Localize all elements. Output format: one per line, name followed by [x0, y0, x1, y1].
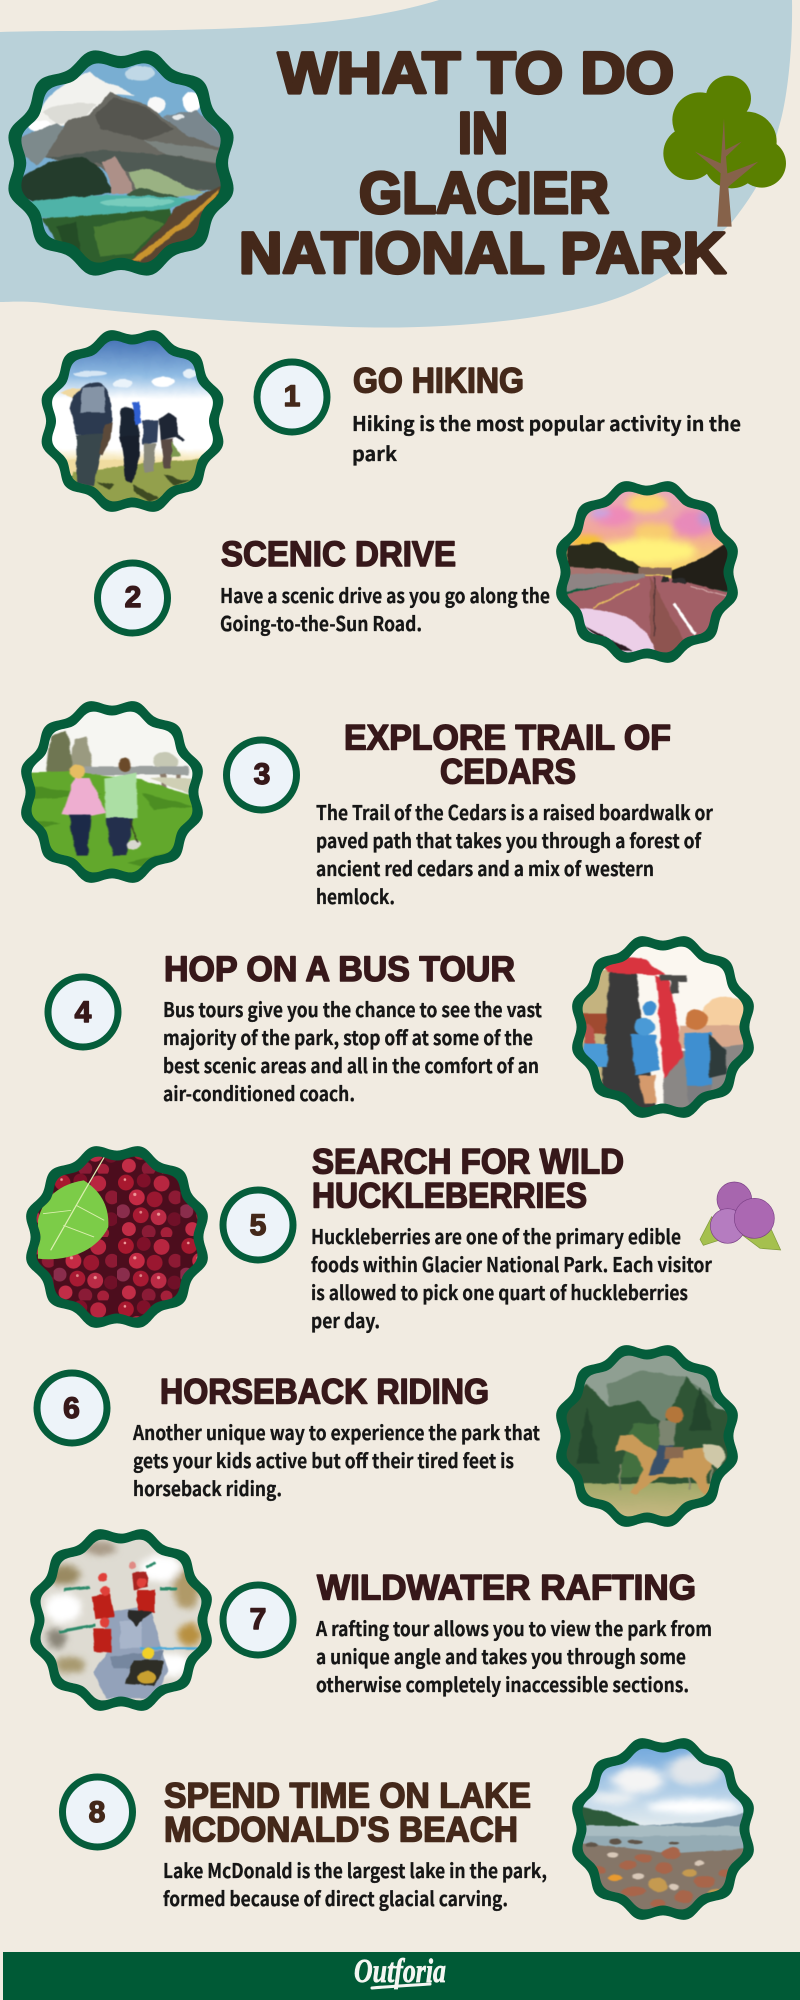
heading: WILDWATER RAFTING: [317, 1568, 696, 1608]
number badge 7: [223, 1585, 293, 1655]
body text: Bus tours give you the chance to see the vast: [163, 994, 542, 1023]
header photo badge: mountain and lake: [8, 50, 234, 276]
body text: Hiking is the most popular activity in the: [352, 408, 741, 437]
body text: otherwise completely inaccessible sections.: [316, 1669, 689, 1698]
body text: park: [352, 438, 397, 467]
number badge 3: 3: [254, 758, 270, 791]
panel: item 5 huckleberries: [26, 1142, 781, 1334]
number badge 4: 4: [75, 996, 92, 1029]
body text: paved path that takes you through a forest of: [316, 825, 702, 854]
body text: a unique angle and takes you through some: [316, 1641, 686, 1670]
body text: The Trail of the Cedars is a raised boardwalk or: [316, 797, 713, 826]
number badge 6: 6: [63, 1392, 80, 1425]
body text: [132, 1417, 540, 1502]
number badge 2: 2: [125, 581, 141, 614]
photo badge: bus and children: [572, 936, 754, 1118]
body text: Huckleberries are one of the primary edible: [311, 1221, 681, 1250]
number badge 5: 5: [250, 1209, 266, 1242]
body text: [316, 797, 713, 910]
panel: item 1 go hiking: [42, 330, 741, 515]
body text: air-conditioned coach.: [163, 1078, 355, 1107]
body text: Going-to-the-Sun Road.: [220, 608, 422, 637]
panel: item 2 scenic drive: [98, 481, 738, 663]
number badge 1: 1: [284, 380, 300, 413]
footer logo: Outforia: Outforia: [354, 1953, 446, 1990]
number badge 6: [37, 1373, 107, 1443]
photo badge: sunset highway: [556, 481, 738, 663]
heading: SPEND TIME ON LAKE: [164, 1776, 531, 1816]
body text: [352, 408, 741, 467]
body text: per day.: [311, 1305, 380, 1334]
body text: Have a scenic drive as you go along the: [220, 580, 550, 609]
body text: [315, 1613, 712, 1698]
number badge 8: [62, 1777, 132, 1847]
panel: item 8 lake mcdonald: [62, 1738, 755, 1920]
number badge 2: [98, 563, 168, 633]
body text: foods within Glacier National Park. Each visitor: [311, 1249, 712, 1278]
body text: [220, 580, 550, 637]
title: GLACIER: [359, 161, 609, 226]
heading: HOP ON A BUS TOUR: [164, 950, 515, 989]
body text: [311, 1221, 712, 1334]
number badge 7: 7: [250, 1603, 266, 1636]
number badge 5: [223, 1190, 293, 1260]
body text: best scenic areas and all in the comfort of an: [163, 1050, 539, 1079]
heading: [312, 1142, 624, 1216]
heading: EXPLORE TRAIL OF: [344, 718, 671, 758]
heading: CEDARS: [440, 752, 576, 792]
panel: item 7 wildwater rafting: [30, 1529, 712, 1711]
body text: hemlock.: [316, 881, 395, 910]
footer bar: [3, 1952, 800, 2000]
title: NATIONAL PARK: [239, 221, 726, 286]
body text: ancient red cedars and a mix of western: [316, 853, 654, 882]
body text: [163, 1855, 547, 1912]
photo badge: hikers: [42, 330, 223, 515]
number badge 3: [226, 740, 296, 810]
photo badge: horse rider: [556, 1345, 740, 1527]
title: WHAT TO DO: [278, 41, 674, 106]
panel: item 3 trail of cedars: [0, 693, 713, 910]
heading: HORSEBACK RIDING: [160, 1372, 489, 1412]
body text: is allowed to pick one quart of huckleberries: [311, 1277, 688, 1306]
body text: Another unique way to experience the park that: [132, 1417, 540, 1446]
body text: majority of the park, stop off at some of the: [163, 1022, 533, 1051]
body text: horseback riding.: [133, 1473, 282, 1502]
number badge 4: [48, 977, 118, 1047]
panel: item 4 bus tour: [48, 934, 766, 1120]
heading: [344, 718, 671, 792]
title: [239, 41, 726, 286]
heading: MCDONALD'S BEACH: [164, 1810, 518, 1850]
body text: [163, 994, 542, 1107]
photo badge: whitewater raft: [30, 1529, 212, 1711]
photo badge: couple walking: [21, 701, 203, 883]
panel: item 6 horseback riding: [37, 1345, 740, 1527]
body text: formed because of direct glacial carving.: [163, 1883, 508, 1912]
photo badge: lake shore: [572, 1738, 755, 1920]
title: IN: [458, 101, 508, 166]
heading: SEARCH FOR WILD: [312, 1142, 624, 1182]
header background blob: [0, 0, 792, 328]
number badge 1: [257, 362, 327, 432]
body text: Lake McDonald is the largest lake in the park,: [163, 1855, 547, 1884]
heading: GO HIKING: [353, 362, 524, 400]
body text: gets your kids active but off their tired feet is: [133, 1445, 514, 1474]
body text: A rafting tour allows you to view the park from: [315, 1613, 712, 1642]
photo badge: huckleberries and leaf: [26, 1146, 208, 1328]
icon: purple berries: [700, 1182, 781, 1250]
heading: [164, 1776, 531, 1850]
heading: SCENIC DRIVE: [221, 535, 456, 574]
icon: tree: [663, 76, 786, 227]
number badge 8: 8: [89, 1796, 105, 1829]
heading: HUCKLEBERRIES: [312, 1176, 587, 1216]
